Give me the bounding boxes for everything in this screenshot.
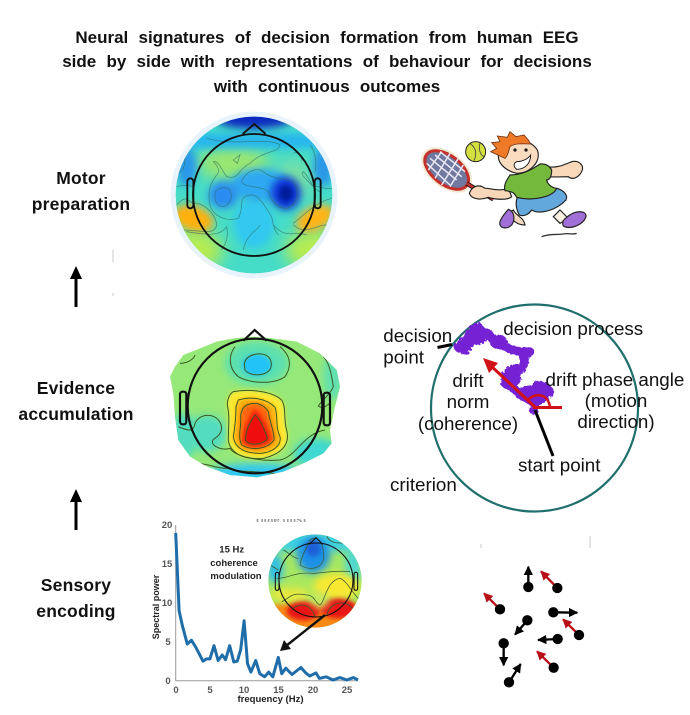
diagram labels: decision bbox=[383, 325, 452, 346]
x tick labels: 25 bbox=[342, 685, 353, 696]
ground scribble bbox=[542, 233, 577, 237]
label: sensory encoding bbox=[36, 575, 116, 621]
y tick labels: 20 bbox=[162, 520, 172, 531]
diagram: diffusion decision model bbox=[383, 304, 684, 512]
inset caption: coherence bbox=[210, 558, 258, 569]
label: evidence accumulation: accumulation bbox=[18, 404, 134, 424]
x tick labels: 10 bbox=[239, 685, 249, 696]
axes bbox=[176, 525, 358, 681]
purple diffusion path bbox=[454, 325, 552, 410]
faint crop marks bbox=[113, 250, 590, 548]
illustration: boy playing tennis bbox=[415, 132, 586, 237]
title: side by side with representations of behaviour for decisions bbox=[62, 52, 592, 71]
diagram labels: (motion bbox=[585, 390, 647, 411]
diagram labels: direction) bbox=[577, 411, 655, 432]
legs bbox=[500, 209, 586, 228]
x tick labels bbox=[173, 685, 353, 696]
shirt bbox=[505, 164, 557, 199]
chart: spectral power: frequency (Hz) bbox=[238, 694, 303, 705]
arms bbox=[469, 161, 583, 199]
spectrum line bbox=[176, 533, 358, 680]
inset caption bbox=[210, 544, 262, 582]
label: evidence accumulation: Evidence bbox=[37, 378, 115, 398]
y tick labels bbox=[162, 520, 173, 687]
inset caption: 15 Hz bbox=[219, 544, 244, 556]
y tick labels: 10 bbox=[162, 598, 172, 609]
title: with continuous outcomes bbox=[213, 77, 440, 96]
diagram labels: (coherence) bbox=[418, 413, 518, 434]
label: motor preparation: Motor bbox=[56, 168, 106, 188]
topomap: motor preparation bbox=[170, 112, 338, 278]
label: motor preparation bbox=[32, 168, 130, 214]
topomap: evidence accumulation bbox=[170, 328, 340, 478]
label: evidence accumulation bbox=[18, 378, 134, 424]
diagram labels: norm bbox=[447, 391, 489, 412]
arrow to 15 Hz peak bbox=[280, 615, 325, 651]
head bbox=[491, 132, 538, 173]
title bbox=[62, 28, 592, 96]
stimulus: moving dots bbox=[484, 567, 584, 687]
y tick labels: 5 bbox=[165, 637, 171, 648]
red drift arrow bbox=[483, 358, 562, 408]
diagram labels: drift phase angle bbox=[546, 369, 684, 390]
y tick labels: 15 bbox=[162, 559, 173, 570]
arrow: sensory to evidence bbox=[70, 489, 82, 530]
label: sensory encoding: Sensory bbox=[41, 575, 111, 595]
shorts bbox=[516, 188, 567, 216]
title: Neural signatures of decision formation from human EEG bbox=[75, 28, 579, 47]
x tick labels: 5 bbox=[207, 685, 213, 696]
diagram labels bbox=[383, 318, 684, 495]
diagram labels: decision process bbox=[503, 318, 643, 339]
x tick labels: 15 bbox=[273, 685, 284, 696]
racket bbox=[415, 141, 493, 199]
chart: spectral power bbox=[151, 514, 363, 705]
x tick labels: 0 bbox=[173, 685, 179, 696]
ball bbox=[466, 142, 486, 162]
label: sensory encoding: encoding bbox=[36, 601, 116, 621]
diagram labels: criterion bbox=[390, 474, 457, 495]
black pointers bbox=[438, 344, 553, 456]
clipped source label: Time (ms) bbox=[254, 514, 306, 526]
criterion circle bbox=[431, 304, 638, 512]
x tick labels: 20 bbox=[308, 685, 318, 696]
diagram labels: point bbox=[383, 346, 425, 368]
diagram labels: drift bbox=[452, 370, 484, 391]
axis titles: Spectral power bbox=[151, 574, 161, 639]
diagram labels: start point bbox=[518, 454, 601, 476]
y tick labels: 0 bbox=[165, 676, 171, 687]
inset topomap bbox=[268, 534, 362, 628]
inset caption: modulation bbox=[210, 571, 262, 582]
label: motor preparation: preparation bbox=[32, 194, 130, 214]
arrow: evidence to motor bbox=[70, 266, 82, 307]
